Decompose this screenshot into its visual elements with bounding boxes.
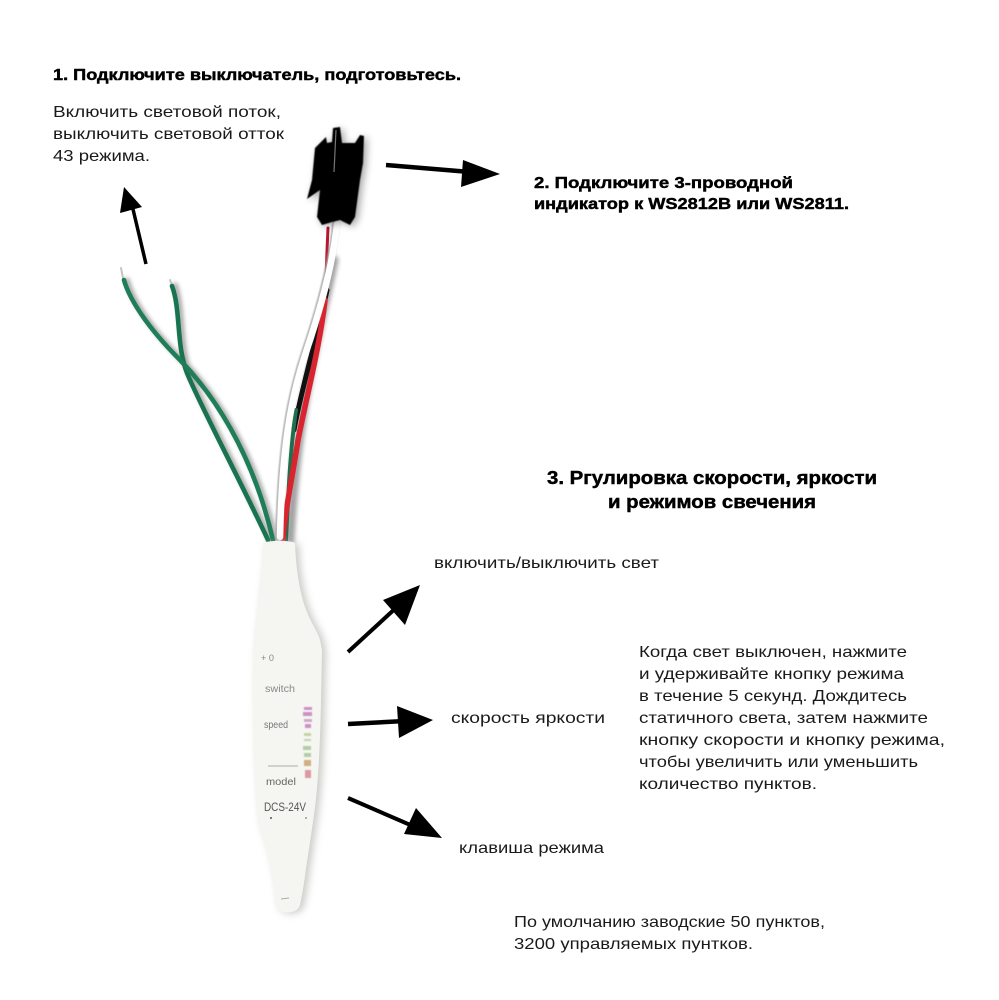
heading: step 3: и режимов свечения [608, 492, 816, 512]
text block: default points note [514, 914, 825, 953]
text block: step 1 description: 43 режима. [53, 148, 150, 165]
text block: step 1 description: Включить световой поток, [53, 104, 281, 121]
heading: step 2 [534, 175, 849, 213]
text block: instructions: в течение 5 секунд. Дождитесь [639, 688, 907, 705]
controller: printed labels: DCS-24V [264, 802, 306, 814]
controller: printed labels: model [266, 776, 296, 788]
connector: black plug [307, 127, 367, 227]
label: speed: скорость яркости [451, 710, 605, 727]
text block: instructions: Когда свет выключен, нажмите [639, 644, 907, 661]
heading: step 2: 2. Подключите 3-проводной [534, 175, 793, 192]
label: switch: включить/выключить свет [434, 555, 660, 572]
controller: printed labels [261, 653, 306, 814]
heading: step 3: 3. Ргулировка скорости, яркости [547, 468, 877, 488]
heading: step 1: 1. Подключите выключатель, подготовьтесь. [53, 67, 461, 84]
arrow: to strip connector [386, 160, 500, 187]
text block: default points note: По умолчанию заводские 50 пунктов, [514, 914, 825, 931]
wires: red, black, green and white strip wires [279, 224, 337, 540]
controller: coloured indicator strip [303, 707, 312, 778]
controller: white body [253, 541, 326, 914]
heading: step 3 [547, 468, 877, 512]
heading: step 2: индикатор к WS2812B или WS2811. [534, 196, 849, 213]
arrow: switch button [348, 585, 420, 652]
text block: instructions: статичного света, затем нажмите [639, 710, 928, 727]
wires: green switch pair [121, 268, 276, 541]
controller: printed labels: switch [265, 683, 295, 695]
text block: instructions [639, 644, 945, 793]
arrow: speed button [348, 706, 433, 738]
text block: step 1 description [53, 104, 285, 165]
controller: printed labels: + 0 [261, 653, 274, 663]
text block: instructions: количество пунктов. [639, 776, 817, 793]
text block: default points note: 3200 управляемых пунтков. [514, 936, 753, 953]
text block: instructions: и удерживайте кнопку режима [639, 666, 904, 683]
controller: printed labels: speed [264, 720, 288, 731]
text block: step 1 description: выключить световой отток [53, 126, 285, 143]
device photo: controller with wires [121, 127, 367, 914]
text block: instructions: кнопку скорости и кнопку режима, [639, 732, 945, 749]
text block: instructions: чтобы увеличить или уменьшить [639, 754, 918, 771]
arrow: to switch wires [120, 187, 146, 264]
arrow: mode button [348, 798, 442, 838]
label: mode: клавиша режима [459, 840, 604, 857]
